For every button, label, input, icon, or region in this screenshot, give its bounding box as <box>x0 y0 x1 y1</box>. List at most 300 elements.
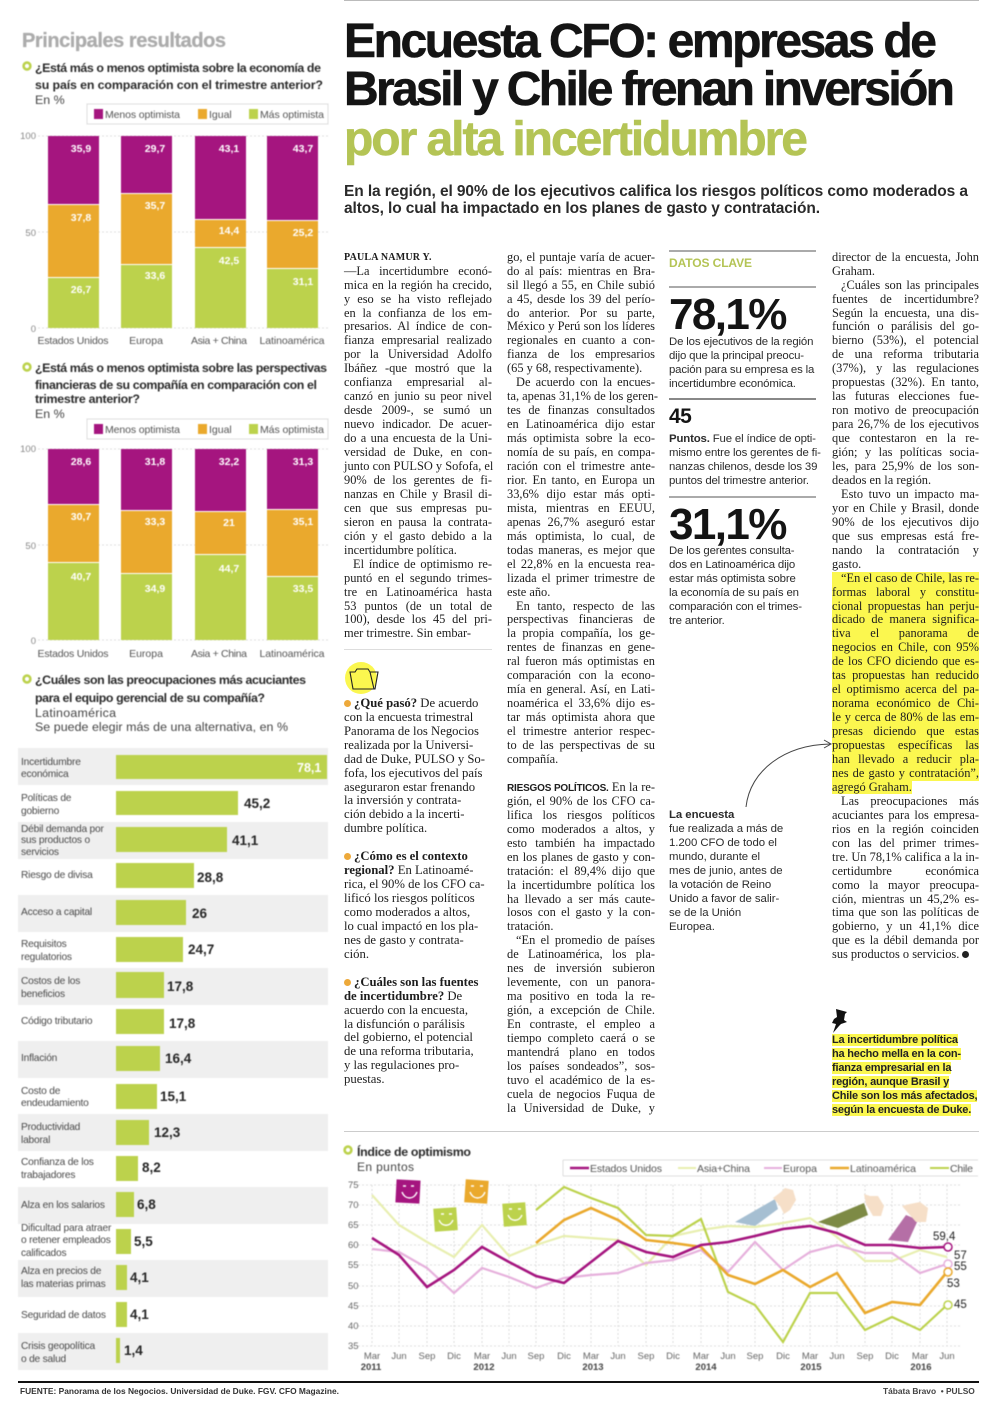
text block: preguntas clave: lificó los riesgos políticos <box>344 891 475 905</box>
stacked bar chart 2: 44,7 <box>219 563 239 575</box>
bar chart: preocupaciones: sus productos o <box>21 835 90 846</box>
body text column 4: dicado de manera significa- <box>832 612 979 626</box>
legend 2: Más optimista <box>260 424 324 436</box>
bar chart: preocupaciones: o retener empleados <box>21 1235 111 1246</box>
body text column 1: incertidumbre política. <box>344 543 457 557</box>
credit: Tábata Bravo • PULSO <box>883 1386 975 1396</box>
body text column 2: en Latinoamérica dijo estar <box>507 417 655 431</box>
body text column 2: regionales en cuanto a con- <box>507 333 655 347</box>
body text column 2: ral fueron más optimistas en <box>507 654 655 668</box>
key figure 45: 45 <box>669 405 691 428</box>
axes and grid: Mar <box>364 1351 380 1362</box>
body text column 2: noamérica el 33,6% dijo es- <box>507 696 655 710</box>
bar chart: preocupaciones: Código tributario <box>21 1016 93 1027</box>
stacked bar chart 2: Latinoamérica <box>260 648 325 660</box>
legend 1 <box>87 104 328 124</box>
bar chart: preocupaciones: Crisis geopolítica <box>21 1341 96 1352</box>
body text column 2: en los planes de gasto y con- <box>507 850 655 864</box>
body text column 1: El índice de optimismo re- <box>353 557 492 571</box>
body text column 4: tas propuestas han reducido <box>832 668 979 682</box>
body text column 4: Según la encuesta, una dis- <box>832 306 979 320</box>
bar chart: preocupaciones: 4,1 <box>130 1270 149 1285</box>
body text column 4: agregó Graham. <box>832 780 912 794</box>
note: la encuesta: 1.200 CFO de todo el <box>669 837 777 849</box>
bar chart: preocupaciones: 6,8 <box>137 1197 156 1212</box>
axes and grid: Dic <box>557 1351 571 1362</box>
body text column 4: como la mayor preocupa- <box>832 878 979 892</box>
body text column 2: ta, apenas 31,1% de los geren- <box>507 389 658 403</box>
bar chart: preocupaciones: las materias primas <box>21 1279 106 1290</box>
body text column 1: cen que sus empresas pu- <box>344 501 492 515</box>
stacked bar chart 1: 0 <box>31 324 36 335</box>
axes and grid: 60 <box>348 1240 359 1251</box>
bar chart: preocupaciones: 16,4 <box>165 1051 192 1066</box>
text block: preguntas clave: nes de gasto y contrata- <box>344 933 464 947</box>
body text column 4: propuestas (32%). En tanto, <box>832 375 979 389</box>
axes and grid: 35 <box>348 1341 359 1352</box>
heading: principales resultados: Principales resultados <box>22 30 226 52</box>
text block: preguntas clave: ción. <box>344 947 369 961</box>
body text column 1: junto con PULSO y Sofofa, el <box>344 459 493 473</box>
body text column 1: —La incertidumbre econó- <box>344 264 492 278</box>
body text column 2: to de las perspectivas de su <box>507 738 655 752</box>
body text column 1: presarios. Al índice de con- <box>344 319 492 333</box>
axes and grid: Mar <box>912 1351 928 1362</box>
body text column 1: canzó en junio su peor nivel <box>344 389 492 403</box>
body text column 4: ¿Cuáles son las principales <box>841 278 979 292</box>
key text 1: De los ejecutivos de la región <box>669 336 813 348</box>
body text column 2: fianza de los empresarios <box>507 347 655 361</box>
axes and grid: Dic <box>666 1351 680 1362</box>
axes and grid: Jun <box>939 1351 955 1362</box>
body text column 2: losos con el gasto y la con- <box>507 905 655 919</box>
axes and grid: Jun <box>829 1351 845 1362</box>
body text column 4: que sus empresas está fre- <box>832 529 979 543</box>
bar chart: preocupaciones: Acceso a capital <box>21 907 92 918</box>
body text column 4: que contestaron en la re- <box>832 431 979 445</box>
body text column 2: gión, a excepción de Chile. <box>507 1003 655 1017</box>
stacked bar chart 2: 100 <box>20 444 36 455</box>
chart heading: En puntos <box>357 1160 414 1174</box>
bar chart: preocupaciones: gobierno <box>21 806 60 817</box>
callout: highlighted summary: La incertidumbre política <box>832 1034 958 1046</box>
question 3: Latinoamérica <box>35 706 116 720</box>
body text column 2: apenas 26,7% aseguró estar <box>507 515 655 529</box>
callout: highlighted summary: ha hecho mella en la con- <box>832 1048 961 1060</box>
body text column 1: ción y el gasto debido a la <box>344 529 492 543</box>
decoration: smiley stickers <box>395 1179 527 1232</box>
body text column 2: tar más optimista ahora que <box>507 710 655 724</box>
stacked bar chart 1: 31,1 <box>293 276 313 288</box>
text block: preguntas clave: ción debido a la incerti- <box>344 807 464 821</box>
stacked bar chart 2: 40,7 <box>71 571 91 583</box>
axes and grid: 45 <box>348 1301 359 1312</box>
legend 1: Más optimista <box>260 109 324 121</box>
body text column 4: ron motivo de preocupación <box>832 403 979 417</box>
stacked bar chart 1: 43,1 <box>219 143 239 155</box>
callout: highlighted summary: según la encuesta de Duke. <box>832 1104 971 1116</box>
key text 3: De los gerentes consulta- <box>669 545 794 557</box>
legend: Latinoamérica <box>850 1163 916 1175</box>
icon: pushpin <box>832 1009 847 1033</box>
question 2: trimestre anterior? <box>35 392 140 406</box>
callout: highlighted summary: fianza empresarial en la <box>832 1062 951 1074</box>
text block: preguntas clave: dumbre política. <box>344 821 427 835</box>
key text 3: estar más optimista sobre <box>669 573 796 585</box>
key text 3 <box>669 545 802 627</box>
stacked bar chart 2: 33,3 <box>145 516 165 528</box>
body text column 2: 33,6% dijo estar más opti- <box>507 487 655 501</box>
body text column 1: en la confianza de los em- <box>344 306 492 320</box>
axes and grid: Sep <box>419 1351 435 1362</box>
line chart: índice de optimismo <box>342 1144 978 1373</box>
body text column 4: tiva el panorama de <box>832 626 979 640</box>
body text column 2: “En el promedio de países <box>516 933 655 947</box>
axes and grid: 2013 <box>582 1362 604 1373</box>
body text column 2: mía en general. Así, en Lati- <box>507 682 655 696</box>
body text column 1: mer trimestre. Sin embar- <box>344 626 471 640</box>
text block: preguntas clave: ¿Cuáles son las fuentes <box>354 975 478 989</box>
key text 3: dos en Latinoamérica dijo <box>669 559 795 571</box>
body text column 4: fuentes de incertidumbre? <box>832 292 979 306</box>
body text column 4: nando la contratación y <box>832 543 979 557</box>
text block: preguntas clave: ¿Cómo es el contexto <box>354 849 468 863</box>
question 2 <box>24 361 327 421</box>
body text column 2: mista, mientras en EEUU, <box>507 501 655 515</box>
key figure 31,1%: 31,1% <box>669 500 786 549</box>
bar chart: preocupaciones: Incertidumbre <box>21 757 81 768</box>
axes and grid: Dic <box>885 1351 899 1362</box>
text block: preguntas clave: ¿Qué pasó? De acuerdo <box>354 696 478 710</box>
text block: preguntas clave: del gobierno, el potencial <box>344 1030 473 1044</box>
body text column 2: el 22,8% en la encuesta rea- <box>507 557 655 571</box>
series: Asia+China <box>372 1195 947 1265</box>
axes and grid: Mar <box>474 1351 490 1362</box>
stacked bar chart 1: 37,8 <box>71 212 91 224</box>
subtitle <box>344 183 968 217</box>
axes and grid: 40 <box>348 1321 359 1332</box>
text block: preguntas clave: de incertidumbre? De <box>344 989 462 1003</box>
end labels: 57 <box>954 1250 967 1262</box>
axes and grid: 70 <box>348 1200 359 1211</box>
bar chart: preocupaciones: laboral <box>21 1135 50 1146</box>
stacked bar chart 2: 34,9 <box>145 583 165 595</box>
stacked bar chart 1: Europa <box>129 335 163 347</box>
question 1 <box>24 61 323 107</box>
subtitle: En la región, el 90% de los ejecutivos califica los riesgos políticos como moderados a <box>344 183 968 200</box>
text block: preguntas clave: fofa, los ejecutivos del país <box>344 766 482 780</box>
legend: Europa <box>783 1163 817 1175</box>
bar chart: preocupaciones: servicios <box>21 847 59 858</box>
note: la encuesta: mes de junio, antes de <box>669 865 783 877</box>
axes and grid: Mar <box>802 1351 818 1362</box>
body text column 4: sus productos o servicios. <box>832 947 959 961</box>
bar chart: preocupaciones: 1,4 <box>124 1343 143 1358</box>
bar chart: preocupaciones: 12,3 <box>154 1125 181 1140</box>
body text column 2: En tanto, respecto de las <box>516 599 655 613</box>
body text column 2: ha llevado a ser más caute- <box>507 892 655 906</box>
title: Encuesta CFO: empresas de <box>344 15 937 68</box>
text block: preguntas clave: como moderados a altos, <box>344 905 470 919</box>
key text 3: tre anterior. <box>669 615 725 627</box>
body text column 4: ción, mientras un 45,2% es- <box>832 892 979 906</box>
bar chart: preocupaciones: beneficios <box>21 989 65 1000</box>
bar chart: preocupaciones: Alza en precios de <box>21 1266 102 1277</box>
stacked bar chart 2: 31,8 <box>145 456 165 468</box>
axes and grid: 2012 <box>473 1362 495 1373</box>
question 1: ¿Está más o menos optimista sobre la economía de <box>35 61 321 75</box>
body text column 2: la propia compañía, los ge- <box>507 626 655 640</box>
title <box>344 15 955 166</box>
body text column 2: levemente, con un panora- <box>507 975 655 989</box>
text block: preguntas clave: Panorama de los Negocios <box>344 724 479 738</box>
body text column 2: rentes de finanzas en gene- <box>507 640 655 654</box>
axes and grid: 2011 <box>361 1362 382 1373</box>
axes and grid: Jun <box>610 1351 626 1362</box>
body text column 2: todas maneras, es mejor que <box>507 543 655 557</box>
key text 1: dijo que la principal preocu- <box>669 350 804 362</box>
text block: preguntas clave: y las regulaciones pro- <box>344 1058 459 1072</box>
stacked bar chart 1: 42,5 <box>219 255 239 267</box>
stacked bar chart 1: 100 <box>20 131 36 142</box>
body text column 4: Esto tuvo un impacto ma- <box>841 487 979 501</box>
stacked bar chart 1: 29,7 <box>145 143 165 155</box>
body text column 2: (65 y 68, respectivamente). <box>507 361 642 375</box>
bar chart: preocupaciones: Inflación <box>21 1053 57 1064</box>
stacked bar chart 1: 50 <box>25 228 36 239</box>
bar chart: preocupaciones: 24,7 <box>188 942 214 957</box>
key text 3: comparación con el trimes- <box>669 601 802 613</box>
body text column 1: puntó en el segundo trimes- <box>344 571 492 585</box>
stacked bar chart 2: 0 <box>31 636 36 647</box>
series: Europa <box>372 1242 947 1293</box>
body text column 2: do al país: mientras en Bra- <box>507 264 655 278</box>
body text column 4: formas laboral y constitu- <box>832 585 979 599</box>
body text column 2: comparación con la econo- <box>507 668 655 682</box>
note: la encuesta: se de la Unión <box>669 907 741 919</box>
body text column 2: ración con el trimestre ante- <box>507 459 655 473</box>
body text column 4: yor en Chile y Brasil, donde <box>832 501 979 515</box>
bar chart: preocupaciones: Alza en los salarios <box>21 1200 105 1211</box>
key text 2: mismo entre los gerentes de fi- <box>669 447 821 459</box>
body text column 2: De acuerdo con la encues- <box>516 375 655 389</box>
body text column 2: como moderados a altos, y <box>507 822 655 836</box>
legend 1: Igual <box>209 109 232 121</box>
body text column 4: rios en la región coinciden <box>832 822 979 836</box>
stacked bar chart 2: 31,3 <box>293 456 313 468</box>
stacked bar chart 1: 14,4 <box>219 225 239 237</box>
stacked bar chart 2: 50 <box>25 541 36 552</box>
body text column 2: tiempo completo caerá o se <box>507 1031 655 1045</box>
stacked bar chart 2 <box>20 444 328 660</box>
body text column 2: a 45, desde los 39 del perío- <box>507 292 655 306</box>
stacked bar chart 1: 35,9 <box>71 143 91 155</box>
body text column 2: ma positivo en toda la re- <box>507 989 655 1003</box>
body text column 4: función o parálisis del go- <box>832 319 979 333</box>
end labels: 55 <box>954 1261 967 1273</box>
source note: FUENTE: Panorama de los Negocios. Universidad de Duke. FGV. CFO Magazine. <box>20 1386 339 1396</box>
body text column 4: nes de gasto y contratación”, <box>832 766 979 780</box>
body text column 1: nuevo indicador. De acuer- <box>344 417 492 431</box>
body text column 2: compañía. <box>507 752 558 766</box>
stacked bar chart 2: 28,6 <box>71 456 91 468</box>
legend: Chile <box>950 1163 973 1175</box>
bar chart: preocupaciones: Confianza de los <box>21 1157 94 1168</box>
stacked bar chart 1: Latinoamérica <box>260 335 325 347</box>
bar chart: preocupaciones: trabajadores <box>21 1170 75 1181</box>
body text column 2: perspectivas financieras de <box>507 612 655 626</box>
text block: preguntas clave: aseguraron estar frenando <box>344 780 475 794</box>
body text column 2: esto también ha impactado <box>507 836 655 850</box>
body text column 2: la Universidad de Duke, y <box>507 1101 655 1115</box>
body text column 2: do anterior. Por su parte, <box>507 306 655 320</box>
subtitle: altos, lo cual ha impactado en los planes de gasto y contratación. <box>344 200 820 217</box>
text block: preguntas clave: dad de Duke, PULSO y So- <box>344 752 485 766</box>
body text column 4: presas diciendo que estas <box>832 724 979 738</box>
bar chart: preocupaciones: o de salud <box>21 1354 67 1365</box>
bar chart: preocupaciones: Riesgo de divisa <box>21 870 93 881</box>
body text column 4: cional propuestas han perju- <box>832 599 979 613</box>
bar chart: preocupaciones: 41,1 <box>232 833 259 848</box>
key text 2: nanzas chilenos, desde los 39 <box>669 461 817 473</box>
callout: highlighted summary <box>832 1034 977 1116</box>
body text column 4: deados en la región. <box>832 473 931 487</box>
icon: folder <box>345 662 379 694</box>
text block: preguntas clave: la disfunción o parálisis <box>344 1017 465 1031</box>
legend 1: Menos optimista <box>105 109 180 121</box>
body text column 1: PAULA NAMUR Y. <box>344 252 432 263</box>
bar chart: preocupaciones: económica <box>21 769 69 780</box>
bar chart: preocupaciones: Dificultad para atraer <box>21 1223 112 1234</box>
axes and grid: Sep <box>857 1351 873 1362</box>
bar chart: preocupaciones: Requisitos <box>21 939 67 950</box>
body text column 1: desde 2009-, se sumó un <box>344 403 492 417</box>
body text column 2: En contraste, el empleo a <box>507 1017 655 1031</box>
question 3: Se puede elegir más de una alternativa, en % <box>35 720 288 734</box>
note: la encuesta: fue realizada a más de <box>669 823 783 835</box>
stacked bar chart 1 <box>20 131 328 347</box>
axes and grid <box>348 1180 960 1373</box>
chart heading <box>345 1144 471 1174</box>
text block: preguntas clave: rica, el 90% de los CFO ca- <box>344 877 485 891</box>
body text column 2: mantendrá plano en todos <box>507 1045 655 1059</box>
callout: highlighted summary: Chile son los más afectados, <box>832 1090 977 1102</box>
body text column 1: sieron en pausa la contrata- <box>344 515 492 529</box>
body text column 4 <box>832 250 979 961</box>
body text column 4: tre. Un 78,1% califica a la in- <box>832 850 979 864</box>
text block: preguntas clave: regional? En Latinoamé- <box>344 863 473 877</box>
bar chart: preocupaciones: calificados <box>21 1248 66 1259</box>
body text column 2: tes de finanzas consultados <box>507 403 655 417</box>
body text column 1: confianza empresarial al- <box>344 375 492 389</box>
question 2: En % <box>35 407 65 421</box>
body text column 4: propuestas específicas las <box>832 738 979 752</box>
text block: preguntas clave: lo cual impactó en los pla- <box>344 919 478 933</box>
note: la encuesta <box>669 809 783 933</box>
body text column 4: gobierno, y un 41,1% dice <box>832 919 979 933</box>
body text column 4: bierno (53%), el potencial <box>832 333 979 347</box>
body text column 2: nomía de su país, en compa- <box>507 445 655 459</box>
body text column 1: fianza empresarial realizado <box>344 333 492 347</box>
end labels: 45 <box>954 1299 967 1311</box>
legend 2 <box>87 419 328 439</box>
body text column 2: RIESGOS POLÍTICOS. En la re- <box>507 780 655 794</box>
axes and grid: Sep <box>528 1351 544 1362</box>
body text column 2: tratación: el 89,4% dijo que <box>507 864 655 878</box>
body text column 1: 100), desde los 45 del pri- <box>344 612 492 626</box>
axes and grid: 55 <box>348 1260 359 1271</box>
bar chart: preocupaciones: 4,1 <box>130 1307 149 1322</box>
bar chart: preocupaciones: 45,2 <box>244 796 270 811</box>
panel: left column charts <box>18 30 329 1370</box>
text block: preguntas clave: con la encuesta trimestral <box>344 710 473 724</box>
bar chart: preocupaciones: 5,5 <box>134 1234 153 1249</box>
body text column 2 <box>507 250 658 1115</box>
body text column 4: tima que son las políticas de <box>832 905 979 919</box>
question 1: En % <box>35 93 65 107</box>
legend 2: Menos optimista <box>105 424 180 436</box>
body text column 4: las futuras elecciones fue- <box>832 389 979 403</box>
body text column 2: sil llegó a 55, en Chile subió <box>507 278 655 292</box>
body text column 2: gión, el 90% de los CFO ca- <box>507 794 655 808</box>
title: Brasil y Chile frenan inversión <box>344 63 955 116</box>
legend: Asia+China <box>697 1163 750 1175</box>
heading: datos clave: DATOS CLAVE <box>669 256 752 270</box>
body text column 4: les, para 25,9% de los son- <box>832 459 979 473</box>
end labels: 59,4 <box>933 1231 956 1243</box>
arrow <box>746 740 832 807</box>
body text column 1: versidad de Duke, en con- <box>344 445 492 459</box>
axes and grid: Dic <box>776 1351 790 1362</box>
bar chart: preocupaciones: 28,8 <box>197 870 224 885</box>
axes and grid: 2014 <box>695 1362 717 1373</box>
stacked bar chart 1: 25,2 <box>293 227 313 239</box>
bar chart: preocupaciones: 26 <box>192 906 208 921</box>
stacked bar chart 2: 32,2 <box>219 456 239 468</box>
body text column 1: do a una encuesta de la Uni- <box>344 431 492 445</box>
decoration: raised thumbs <box>735 1188 928 1242</box>
series: Latinoamérica <box>536 1208 947 1313</box>
body text column 4: con las del primer trimes- <box>832 836 979 850</box>
question 3 <box>24 673 306 734</box>
stacked bar chart 1: Estados Unidos <box>38 335 108 347</box>
title: por alta incertidumbre <box>344 113 808 166</box>
stacked bar chart 2: Estados Unidos <box>38 648 108 660</box>
body text column 4: “En el caso de Chile, las re- <box>841 571 979 585</box>
bar chart: preocupaciones: Costos de los <box>21 976 80 987</box>
question 1: su país en comparación con el trimestre anterior? <box>35 78 323 92</box>
bar chart: preocupaciones: Productividad <box>21 1122 81 1133</box>
body text column 4: Graham. <box>832 264 875 278</box>
body text column 2: más optimista sobre la eco- <box>507 431 655 445</box>
body text column 2: go, el puntaje varía de acuer- <box>507 250 655 264</box>
body text column 2: de Latinoamérica, los pla- <box>507 947 655 961</box>
axes and grid: Mar <box>693 1351 709 1362</box>
axes and grid: Jun <box>391 1351 407 1362</box>
body text column 4: han llevado a reducir pla- <box>832 752 979 766</box>
bar chart: preocupaciones: 8,2 <box>142 1160 161 1175</box>
stacked bar chart 1: 33,6 <box>145 270 165 282</box>
body text column 2: tratación. <box>507 919 553 933</box>
key text 1: pación para su empresa es la <box>669 364 814 376</box>
body text column 4: Las preocupaciones más <box>841 794 979 808</box>
body text column 4: certidumbre económica <box>832 864 979 878</box>
body text column 1: 53 puntos (de un total de <box>344 599 492 613</box>
text block: preguntas clave: la inversión y contrata- <box>344 793 461 807</box>
series: Estados Unidos <box>372 1226 947 1287</box>
body text column 2: más optimista, lo cual, de <box>507 529 655 543</box>
legend: Estados Unidos <box>590 1163 662 1175</box>
